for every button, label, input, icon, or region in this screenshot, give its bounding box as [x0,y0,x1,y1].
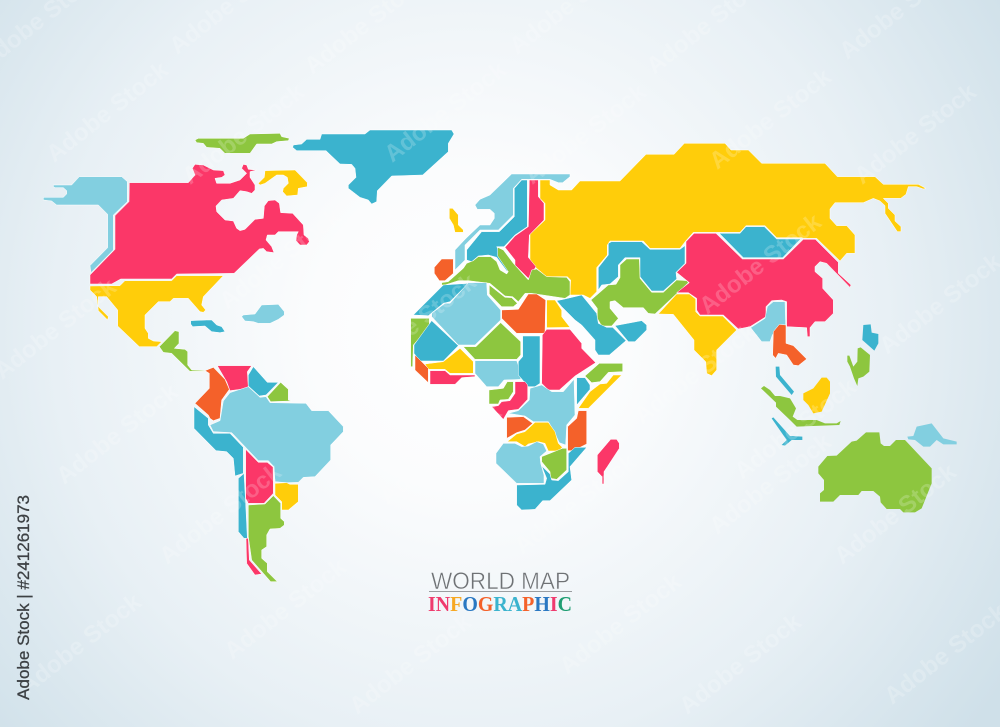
map: Central and South Africa [415,329,623,510]
watermark: Adobe Stock [729,373,862,485]
watermark: Adobe Stock [14,588,147,700]
Sumatra and Java [761,386,841,427]
Argentina [248,496,284,582]
watermark: Adobe Stock [51,378,184,490]
heading: world map: WORLD MAP [431,568,570,595]
map: South America [194,366,343,582]
Oman [615,321,647,342]
watermark: Adobe Stock [214,203,347,315]
India [658,294,737,376]
Iceland [449,208,463,232]
Gabon [507,417,533,438]
South Africa [517,447,587,510]
title [428,568,572,616]
watermark: Adobe Stock [704,63,837,175]
Sulawesi [772,417,802,446]
watermark: Adobe Stock [177,78,310,190]
map: North America [43,130,454,371]
Algeria [432,283,501,345]
United Kingdom [434,259,453,281]
Borneo [803,378,830,413]
watermark: Adobe Stock [374,398,507,510]
China [677,233,851,337]
Angola and Namibia [496,442,547,483]
Egypt [502,294,546,333]
Finland and Ukraine [505,180,544,278]
Chile [238,473,247,538]
Bolivia [246,449,273,503]
Philippines south [847,347,870,386]
Baffin island [258,170,307,196]
Mongolia [719,227,801,258]
Nigeria [489,382,513,404]
watermark: Adobe Stock [674,608,807,720]
Central Asia [598,242,685,291]
Paraguay and Uruguay [275,483,298,510]
watermark: Adobe Stock [41,56,174,168]
Norway [455,174,570,270]
New Guinea [907,423,957,447]
Sudan [542,329,596,390]
Western Sahara [411,318,429,367]
Australia [818,432,932,512]
stock id label: Adobe Stock | #241261973 [14,495,33,700]
map: Southeast Asia and Oceania [761,324,957,512]
watermark: Adobe Stock [829,458,962,570]
Morocco [413,283,468,316]
watermark: Adobe Stock [344,608,477,720]
watermark: Adobe Stock [704,428,837,540]
watermark: Adobe Stock [349,268,482,380]
watermark: Adobe Stock [694,208,827,320]
Horn of Africa [585,363,623,383]
Central America [159,331,205,371]
Suriname [267,382,292,402]
watermark: Adobe Stock [629,318,762,430]
Madagascar [597,439,619,484]
Nile strip [518,336,540,387]
Zambia [507,422,562,451]
Thailand [773,324,807,366]
Myanmar [751,302,786,342]
Tunisia strip [489,285,517,307]
watermark: Adobe Stock [219,553,352,665]
Iran and Afghanistan [591,259,688,326]
watermark: Adobe Stock [849,78,982,190]
map: Africa [411,283,546,367]
watermark: Adobe Stock [379,56,512,168]
USA and Mexico [90,276,223,347]
Greenland [293,130,454,204]
southern tip [246,538,262,575]
watermark: Adobe Stock [519,78,652,190]
Peru [194,407,243,476]
watermark: Adobe Stock [154,458,287,570]
map: Europe and Middle East [434,174,626,355]
watermark: Adobe Stock [554,568,687,680]
southern Europe and Turkey [442,247,570,302]
Senegal [415,355,428,383]
Cameroon [492,382,528,419]
Tanzania [568,411,587,451]
Guinea [430,371,475,384]
heading: infographic: INFOGRAPHIC [428,592,572,616]
title rule [429,591,572,592]
Chad [463,323,521,359]
Brazil [210,387,343,483]
Colombia [195,367,229,421]
watermark: Adobe Stock [509,448,642,560]
Ethiopia [577,378,590,405]
map: Asia [530,143,926,376]
Canada [90,164,309,284]
Hispaniola [242,304,284,323]
Sweden and Germany [467,180,527,272]
Congo [508,379,575,445]
Arabian strip [557,295,626,355]
Niger [475,361,521,387]
Guyana [248,367,278,396]
Sinai [547,300,570,328]
Cuba [191,320,225,333]
Venezuela [217,366,252,391]
Russia [530,143,926,298]
Mali [425,348,473,373]
Zimbabwe [542,448,567,479]
Arctic island [195,133,289,153]
Malay peninsula [776,367,794,395]
Somalia [578,375,622,408]
Alaska [43,177,127,273]
Mauritania [414,321,458,361]
Philippines north [862,324,878,351]
